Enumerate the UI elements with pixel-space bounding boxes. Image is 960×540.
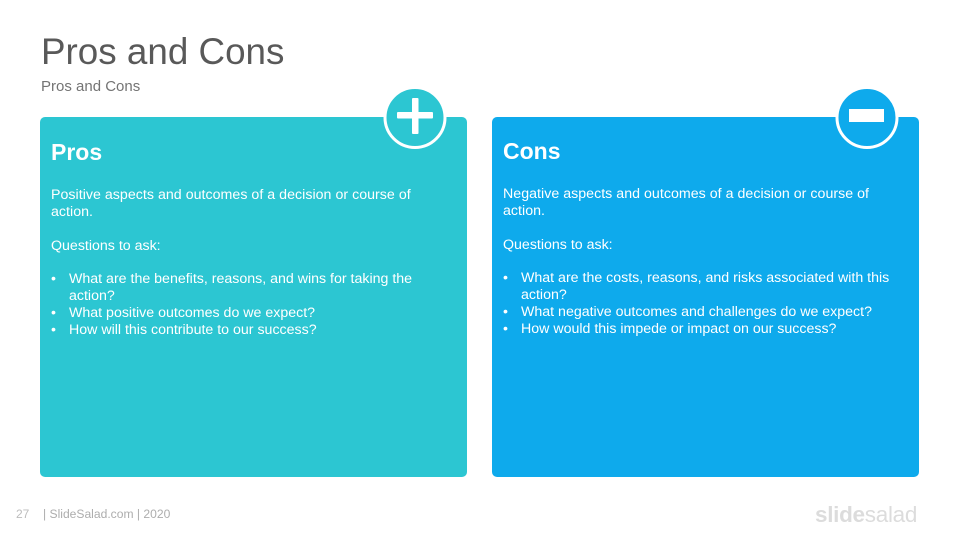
pros bullet list: • <box>51 322 56 338</box>
cons heading: Cons <box>503 138 560 164</box>
cons bullet list: • <box>503 321 508 337</box>
pros heading: Pros <box>51 139 102 165</box>
footer text: | SlideSalad.com | 2020 <box>43 507 170 521</box>
pros description: Positive aspects and outcomes of a decision or course of <box>51 187 411 203</box>
subtitle: Pros and Cons <box>41 78 140 95</box>
pros bullet list <box>51 271 412 338</box>
panel: pros <box>40 117 467 477</box>
cons bullet list: action? <box>521 287 567 303</box>
pros bullet list: action? <box>69 288 115 304</box>
title: Pros and Cons <box>41 31 284 72</box>
cons bullet list: • <box>503 304 508 320</box>
cons description: Negative aspects and outcomes of a decision or course of <box>503 186 869 202</box>
pros bullet list: • <box>51 271 56 287</box>
cons bullet list: • <box>503 270 508 286</box>
icon: minus badge <box>836 89 898 149</box>
logo wordmark: slidesalad <box>815 502 917 527</box>
cons bullet list: What negative outcomes and challenges do we expect? <box>521 304 872 320</box>
cons bullet list: How would this impede or impact on our success? <box>521 321 836 337</box>
pros questions label: Questions to ask: <box>51 238 161 254</box>
pros bullet list: How will this contribute to our success? <box>69 322 317 338</box>
panel: cons <box>492 117 919 477</box>
cons description <box>503 186 869 219</box>
pros description: action. <box>51 204 93 220</box>
pros description <box>51 187 411 220</box>
cons description: action. <box>503 203 545 219</box>
icon: plus badge <box>384 89 446 149</box>
cons questions label: Questions to ask: <box>503 237 613 253</box>
pros bullet list: • <box>51 305 56 321</box>
cons bullet list: What are the costs, reasons, and risks associated with this <box>521 270 889 286</box>
cons bullet list <box>503 270 889 337</box>
pros bullet list: What positive outcomes do we expect? <box>69 305 315 321</box>
page number: 27 <box>16 507 29 521</box>
pros bullet list: What are the benefits, reasons, and wins for taking the <box>69 271 412 287</box>
